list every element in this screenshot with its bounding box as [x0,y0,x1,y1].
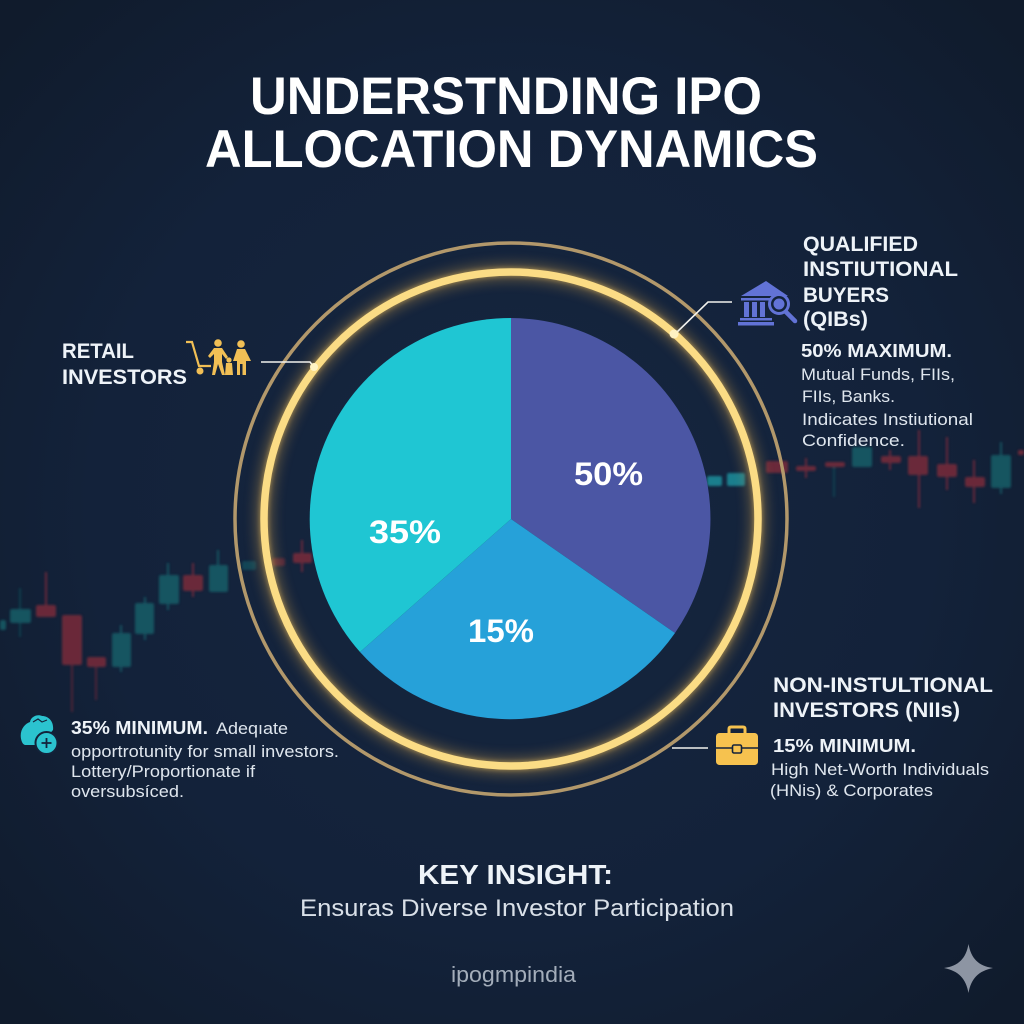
text: retail description: 35% MINIMUM. [71,718,208,738]
pie chart [310,318,710,719]
label: 50%: 50% [574,456,643,492]
icon: sparkle [944,944,993,993]
text: retail description: opportrotunity for small investors. [71,742,339,761]
heading: retail investors: INVESTORS [62,366,187,389]
leader: NIIs [672,747,708,749]
label: 15%: 15% [468,613,534,649]
key insight [300,859,734,922]
text: QIBs description [801,340,973,450]
text: NIIs description: High Net-Worth Individuals [771,760,989,779]
icon: bank with magnifier [738,281,795,326]
title: UNDERSTNDING IPO [250,67,762,126]
text: QIBs description: Mutual Funds, FIIs, [801,365,955,384]
heading: QIBs [803,233,958,331]
heading: QIBs: INSTIUTIONAL [803,258,958,281]
text: QIBs description: FIIs, Banks. [802,387,895,406]
heading: retail investors [62,340,187,389]
key insight: Ensuras Diverse Investor Participation [300,895,734,922]
key insight: KEY INSIGHT: [418,859,613,890]
gold rings [235,243,787,795]
text: QIBs description: 50% MAXIMUM. [801,340,952,361]
label: 35%: 35% [369,514,441,550]
text: QIBs description: Confidence. [802,431,905,450]
heading: QIBs: BUYERS [803,284,889,307]
icon: retail cart and family [186,339,251,375]
text: retail description [71,718,339,801]
text: NIIs description: (HNis) & Corporates [770,781,933,800]
text: retail description: oversubsíced. [71,782,184,801]
title [205,67,818,179]
text: NIIs description: 15% MINIMUM. [773,735,916,756]
icon: teal bag with plus [21,715,57,754]
slice: Retail 35% [310,318,511,652]
text: NIIs description [770,735,989,800]
text: retail description: Lottery/Proportionate if [71,762,255,781]
leader: retail [261,362,318,371]
heading: retail investors: RETAIL [62,340,134,363]
heading: NIIs: INVESTORS (NIIs) [773,699,960,722]
heading: QIBs: (QIBs) [803,308,868,331]
leader: QIBs [670,302,732,338]
text: QIBs description: Indicates Instiutional [802,410,973,429]
candlestick chart backdrop [0,430,1024,712]
icon: briefcase [716,727,758,765]
text: retail description: Adeqıate [216,719,288,738]
heading: NIIs: NON-INSTULTIONAL [773,674,993,697]
heading: NIIs [773,674,993,722]
brand text: ipogmpindia [451,962,577,987]
heading: QIBs: QUALIFIED [803,233,918,256]
title: ALLOCATION DYNAMICS [205,120,818,179]
slice: NIIs 15% [360,519,675,719]
slice: QIBs 50% [511,318,710,633]
